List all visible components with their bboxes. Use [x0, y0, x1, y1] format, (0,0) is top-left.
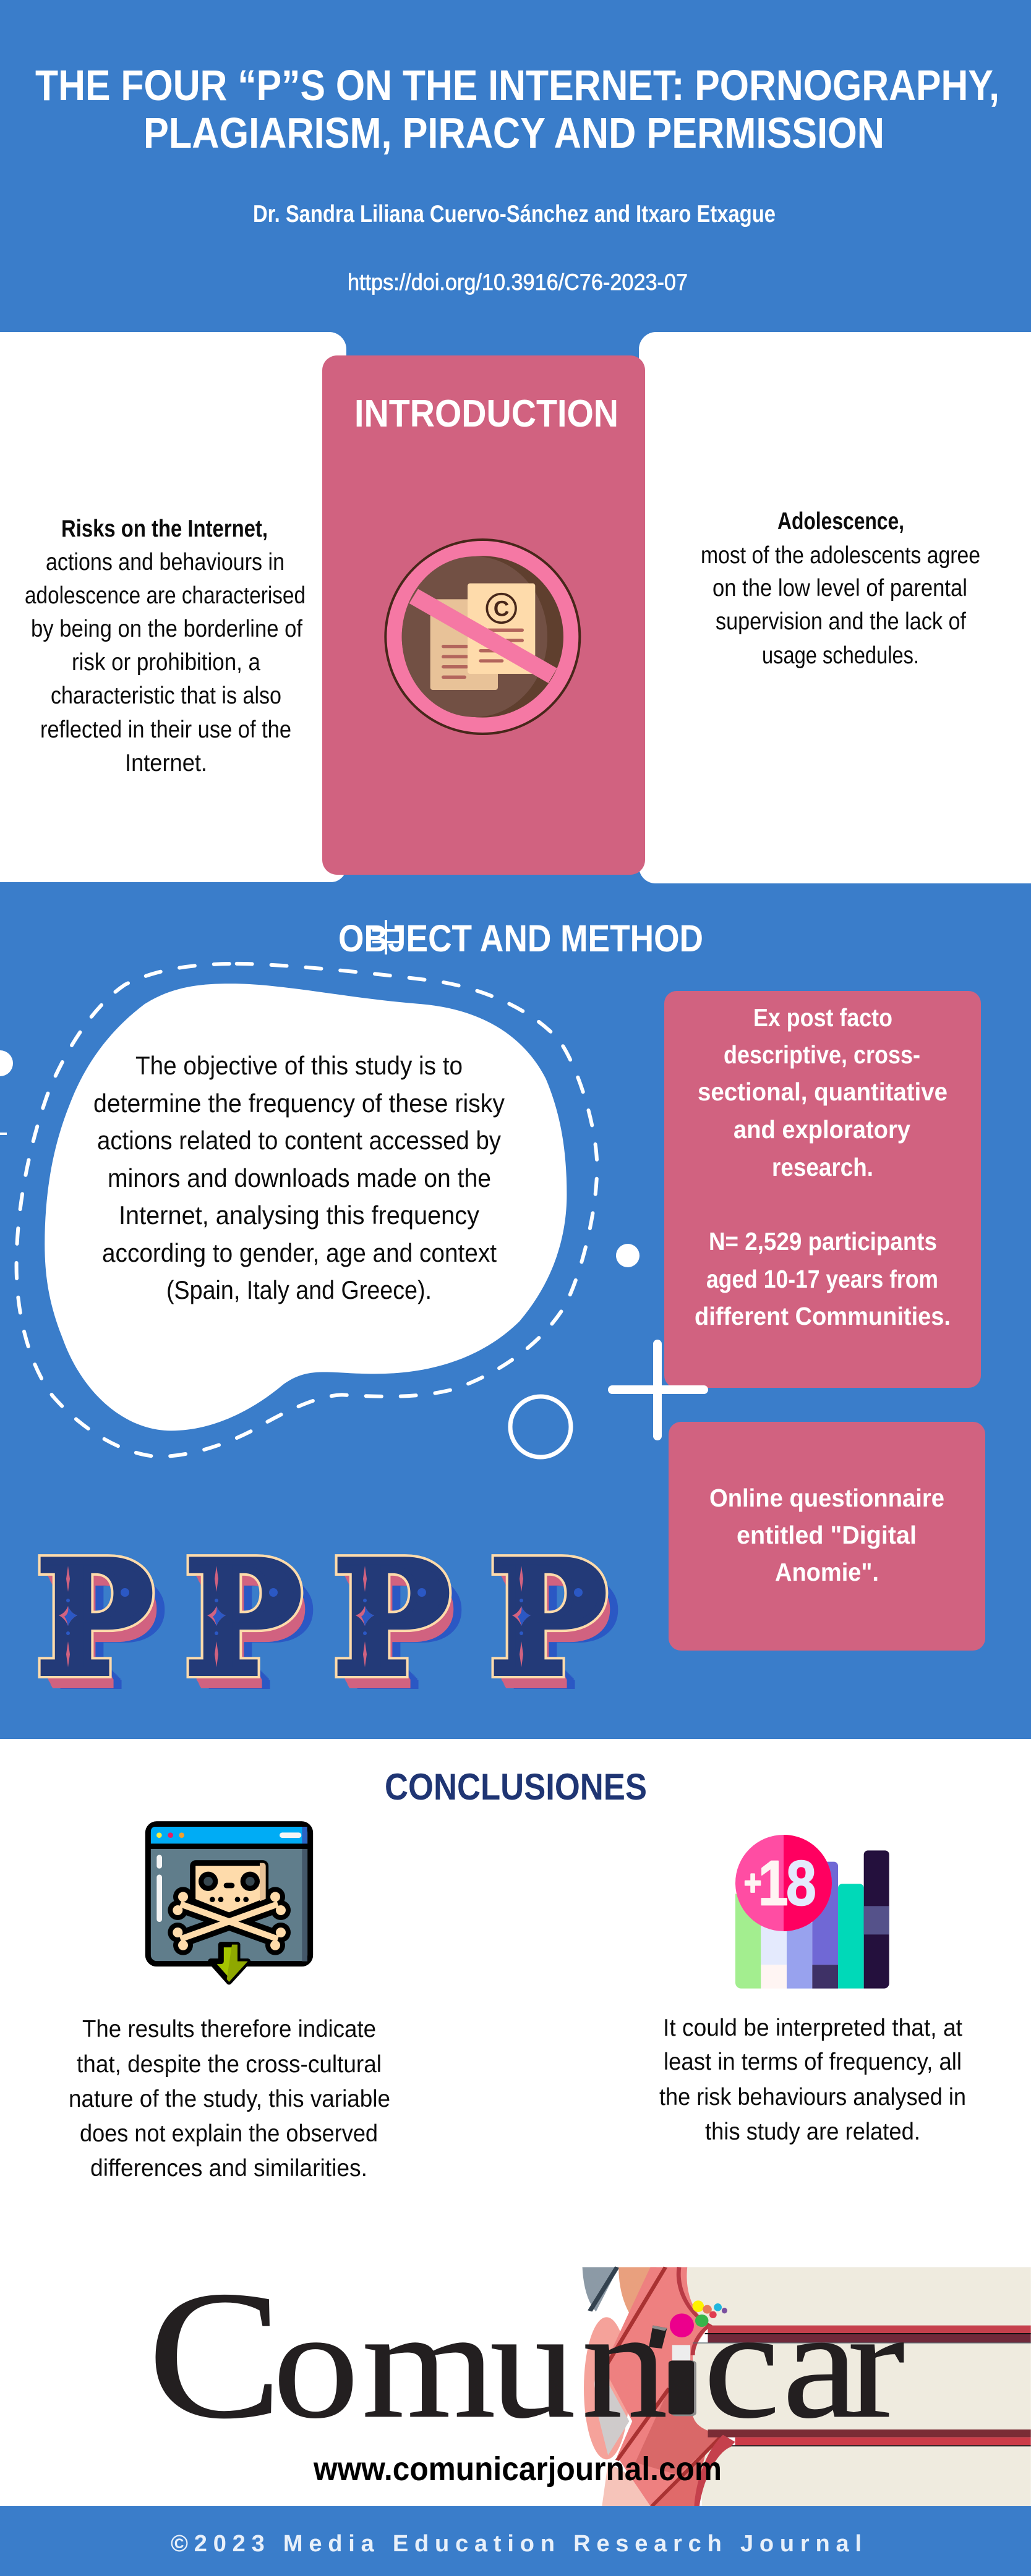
panel: adolescence — [639, 332, 1031, 883]
text: conclusion left — [69, 2016, 390, 2182]
text: risks: reflected in their use of the — [40, 716, 291, 743]
text: objective: The objective of this study is to — [135, 1051, 463, 1080]
icon: piracy download window — [148, 1824, 310, 1982]
text: risks: by being on the borderline of — [31, 616, 302, 642]
decorative dash left — [0, 1133, 7, 1135]
text: research design: N= 2,529 participants — [709, 1227, 937, 1256]
decorative dot right — [616, 1244, 640, 1267]
text: research design: Ex post facto — [753, 1003, 892, 1032]
text: objective: according to gender, age and context — [102, 1238, 497, 1267]
text: risks: adolescence are characterised — [25, 582, 306, 609]
logo: comunicar wordmark: C — [148, 2253, 283, 2457]
text: questionnaire: entitled "Digital — [737, 1521, 917, 1549]
text: risks: actions and behaviours in — [46, 549, 284, 576]
title — [35, 61, 999, 157]
letter P 4: P — [490, 1529, 605, 1709]
text: objective: (Spain, Italy and Greece). — [166, 1275, 432, 1304]
page background: blue — [0, 0, 1031, 1739]
decorative ring — [510, 1396, 571, 1457]
decorative letters: four Ps — [37, 1529, 618, 1709]
text: research design: sectional, quantitative — [698, 1078, 948, 1106]
text: adolescence: Adolescence, — [777, 508, 904, 535]
text: conclusion left: differences and similarities. — [90, 2155, 367, 2182]
text: conclusion right — [659, 2015, 966, 2145]
text: questionnaire: Online questionnaire — [709, 1484, 944, 1512]
text: risks — [25, 516, 306, 776]
icon: books with +18 badge — [735, 1835, 889, 1989]
text: conclusion left: that, despite the cross-cultural — [77, 2051, 382, 2078]
text: adolescence: usage schedules. — [762, 642, 919, 669]
icon: books with +18 badge: + — [744, 1863, 761, 1903]
text: adolescence: supervision and the lack of — [716, 608, 966, 635]
text: adolescence: most of the adolescents agree — [701, 542, 980, 569]
text: questionnaire — [709, 1484, 944, 1586]
text: research design: descriptive, cross- — [724, 1040, 920, 1069]
text: conclusion right: It could be interpreted that, at — [663, 2015, 962, 2041]
text: conclusion right: the risk behaviours analysed in — [659, 2084, 966, 2111]
logo: comunicar wordmark — [148, 2253, 905, 2457]
text: objective — [93, 1051, 505, 1304]
icon: books with +18 badge: 1 — [758, 1848, 789, 1919]
heading: introduction: INTRODUCTION — [354, 393, 618, 435]
text: adolescence: on the low level of parental — [712, 575, 967, 601]
text: research design: different Communities. — [695, 1302, 951, 1330]
text: research design — [695, 1003, 951, 1330]
icon: no copyright — [384, 538, 581, 735]
text: research design: research. — [772, 1153, 873, 1181]
text: conclusion right: this study are related. — [705, 2119, 920, 2145]
letter P 3: P — [334, 1529, 449, 1709]
text: conclusion left: The results therefore indicate — [82, 2016, 376, 2043]
text: questionnaire: Anomie". — [775, 1558, 879, 1586]
decorative dashed blob with objective — [17, 964, 597, 1456]
logo: comunicar wordmark: car — [703, 2277, 905, 2451]
footer band — [0, 2506, 1031, 2576]
authors: Dr. Sandra Liliana Cuervo-Sánchez and Itxaro Etxague — [253, 201, 776, 227]
text: research design: and exploratory — [734, 1115, 910, 1144]
text: risks: characteristic that is also — [51, 682, 281, 709]
text: adolescence — [701, 508, 980, 669]
text: objective: actions related to content accessed by — [97, 1126, 501, 1155]
title: PLAGIARISM, PIRACY AND PERMISSION — [143, 109, 884, 157]
panel: risks on the internet — [0, 332, 346, 882]
panel: questionnaire — [669, 1422, 985, 1651]
text: risks: Internet. — [125, 750, 207, 776]
heading: object and method: OBJECT AND METHOD — [338, 917, 703, 959]
text: objective: determine the frequency of these risky — [93, 1089, 505, 1118]
text: conclusion left: does not explain the observed — [80, 2120, 378, 2147]
decorative dot left — [0, 1050, 13, 1076]
panel: introduction — [322, 355, 645, 875]
logo: comunicar wordmark: omun — [273, 2277, 668, 2451]
heading: conclusiones: CONCLUSIONES — [385, 1766, 647, 1808]
website: www.comunicarjournal.com — [313, 2451, 722, 2488]
decorative plus — [608, 1340, 708, 1440]
footer text: ©2023 Media Education Research Journal — [171, 2531, 862, 2557]
icon: no copyright: C — [494, 597, 509, 621]
panel: research design — [664, 991, 981, 1388]
letter P 1: P — [37, 1529, 152, 1709]
text: risks: Risks on the Internet, — [61, 516, 268, 542]
text: risks: risk or prohibition, a — [72, 649, 260, 676]
text: objective: Internet, analysing this frequency — [119, 1201, 479, 1230]
text: research design: aged 10-17 years from — [706, 1265, 938, 1293]
letter P 2: P — [186, 1529, 301, 1709]
icon: usb stick as letter i — [649, 2300, 727, 2416]
text: conclusion left: nature of the study, this variable — [69, 2086, 390, 2112]
image: stack of books — [583, 2267, 1031, 2506]
text: conclusion right: least in terms of frequency, all — [664, 2049, 962, 2075]
icon: books with +18 badge: 8 — [786, 1848, 816, 1919]
text: objective: minors and downloads made on the — [108, 1163, 491, 1192]
doi link: https://doi.org/10.3916/C76-2023-07 — [348, 270, 688, 295]
